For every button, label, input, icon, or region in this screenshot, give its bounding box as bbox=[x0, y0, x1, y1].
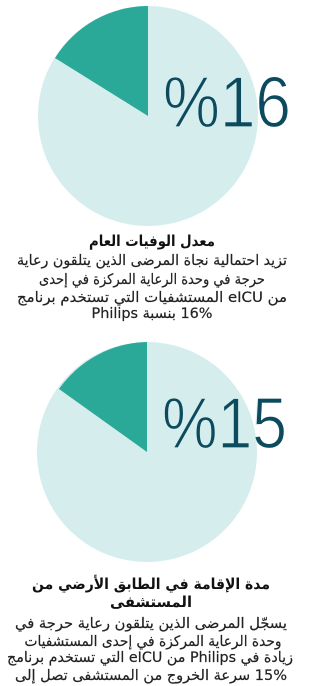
text block: mortality description bbox=[17, 253, 287, 322]
text block: stay description bbox=[7, 616, 293, 685]
heading: overall mortality: معدل الوفيات العام bbox=[89, 232, 215, 250]
text block: mortality description: Philips بنسبة ‎16% bbox=[92, 306, 212, 322]
text block: stay description: ‎15%‎ سرعة الخروج من المستشفى تصل إلى bbox=[15, 668, 287, 685]
pie chart: 16% bbox=[38, 6, 258, 226]
text block: stay description: يسجّل المرضى الذين يتلقون رعاية حرجة في bbox=[15, 616, 287, 632]
heading: ground floor stay: مدة الإقامة في الطابق الأرضي من bbox=[32, 575, 270, 593]
heading: ground floor stay bbox=[32, 575, 270, 611]
stat: 16%: %16 bbox=[163, 63, 291, 143]
text block: stay description: زيادة في Philips من eICU التي تستخدم برنامج bbox=[7, 650, 293, 666]
text block: stay description: وحدة الرعاية المركزة في إحدى المستشفيات bbox=[24, 634, 282, 650]
panel: ground floor stay bbox=[7, 342, 293, 685]
stat: 15%: %15 bbox=[162, 384, 287, 464]
panel: overall mortality bbox=[17, 6, 291, 322]
heading: ground floor stay: المستشفى bbox=[110, 593, 192, 611]
text block: mortality description: من eICU المستشفيات التي تستخدم برنامج bbox=[17, 290, 287, 306]
pie chart: 15% bbox=[37, 342, 257, 562]
text block: mortality description: تزيد احتمالية نجاة المرضى الذين يتلقون رعاية bbox=[17, 253, 287, 269]
text block: mortality description: حرجة في وحدة الرعاية المركزة في إحدى bbox=[39, 272, 265, 288]
